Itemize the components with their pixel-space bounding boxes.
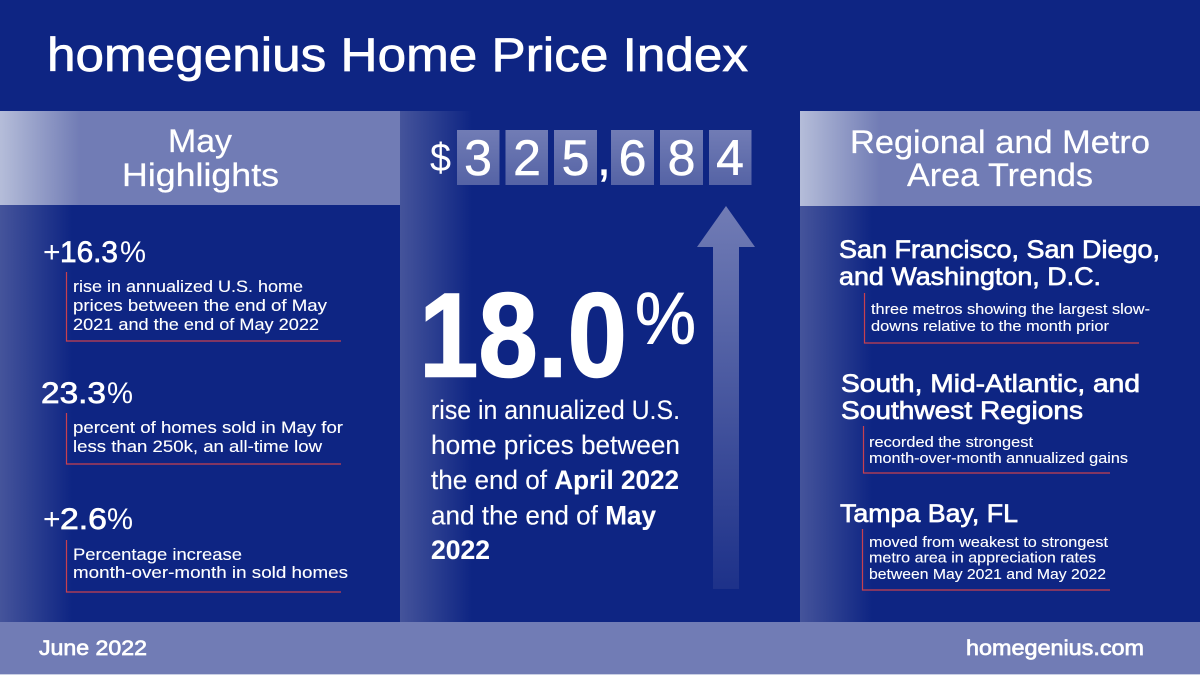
price ticker: 3 — [464, 130, 492, 186]
price ticker: , — [597, 130, 611, 186]
big number: 18.0%: 18.0 — [419, 268, 627, 402]
stat: 23.3%: % — [107, 377, 133, 410]
price ticker: 2 — [513, 130, 541, 186]
trend: San Francisco, San Diego, Washington D.C.: downs relative to the month prior — [871, 318, 1109, 335]
trend: San Francisco, San Diego, Washington D.C. — [839, 236, 1160, 343]
price ticker: $ — [430, 136, 451, 180]
description: 18.0% rise: 2022 — [431, 535, 490, 565]
trend: South, Mid-Atlantic, Southwest: Southwest Regions — [841, 397, 1083, 425]
stat: +16.3% — [43, 236, 341, 341]
footer date: June 2022 — [39, 637, 147, 660]
trend: Tampa Bay: Tampa Bay, FL — [840, 500, 1018, 528]
trend: Tampa Bay: moved from weakest to strongest — [869, 534, 1109, 551]
stat: 23.3% — [41, 377, 344, 464]
description: 18.0% rise: home prices between — [431, 430, 680, 460]
stat: +16.3%: rise in annualized U.S. home — [73, 278, 303, 296]
stat: +2.6% — [43, 503, 348, 592]
description: 18.0% rise: the end of April 2022 — [431, 465, 679, 495]
price ticker: 4 — [716, 130, 744, 186]
trend: South, Mid-Atlantic, Southwest: recorded the strongest — [869, 434, 1034, 451]
trend: Tampa Bay: between May 2021 and May 2022 — [869, 566, 1106, 583]
description: 18.0% rise: rise in annualized U.S. — [431, 395, 680, 425]
heading band: Regional and Metro Area Trends: Regional and Metro — [850, 124, 1150, 160]
footer website: homegenius.com — [966, 637, 1144, 660]
price ticker — [430, 130, 752, 186]
heading band: Regional and Metro Area Trends — [800, 111, 1200, 206]
heading band: May Highlights: May — [168, 123, 232, 159]
trend: San Francisco, San Diego, Washington D.C.: San Francisco, San Diego, — [839, 236, 1160, 264]
stat: +2.6%: month-over-month in sold homes — [73, 564, 348, 582]
stat: +16.3%: % — [120, 236, 146, 269]
stat: 23.3%: percent of homes sold in May for — [73, 419, 344, 437]
stat: 23.3%: 23.3 — [41, 377, 106, 410]
stat: 23.3%: less than 250k, an all-time low — [73, 438, 322, 456]
trend: Tampa Bay — [840, 500, 1110, 590]
heading band: May Highlights — [0, 111, 400, 205]
price ticker: 8 — [668, 130, 695, 186]
panel: center headline — [400, 111, 755, 622]
trend: San Francisco, San Diego, Washington D.C.: three metros showing the largest slow- — [871, 301, 1150, 318]
trend: South, Mid-Atlantic, Southwest: month-over-month annualized gains — [869, 450, 1128, 467]
price ticker: 5 — [562, 130, 589, 186]
panel: May Highlights — [0, 111, 400, 622]
stat: +16.3%: 2021 and the end of May 2022 — [73, 316, 319, 334]
price ticker: 6 — [619, 130, 646, 186]
heading band: Regional and Metro Area Trends: Area Trends — [907, 157, 1093, 193]
stat: +16.3%: + — [43, 236, 61, 269]
heading band: May Highlights: Highlights — [122, 157, 279, 193]
stat: +2.6%: 2.6 — [60, 503, 107, 536]
arrow: rising price — [697, 206, 755, 589]
description: 18.0% rise: and the end of May — [431, 500, 656, 530]
trend: South, Mid-Atlantic, Southwest: South, Mid-Atlantic, and — [841, 370, 1140, 398]
stat: +16.3%: 16.3 — [60, 236, 118, 269]
big number: 18.0%: % — [635, 278, 696, 360]
trend: South, Mid-Atlantic, Southwest — [841, 370, 1140, 473]
panel: Regional and Metro Area Trends — [800, 111, 1200, 622]
stat: +16.3%: prices between the end of May — [73, 297, 328, 315]
description: 18.0% rise — [431, 395, 680, 565]
trend: San Francisco, San Diego, Washington D.C.: and Washington, D.C. — [839, 263, 1101, 291]
stat: +2.6%: Percentage increase — [73, 546, 242, 564]
title: homegenius Home Price Index — [47, 28, 748, 81]
footer — [0, 622, 1200, 675]
stat: +2.6%: + — [43, 503, 61, 536]
stat: +2.6%: % — [107, 503, 133, 536]
trend: Tampa Bay: metro area in appreciation rates — [869, 550, 1096, 566]
